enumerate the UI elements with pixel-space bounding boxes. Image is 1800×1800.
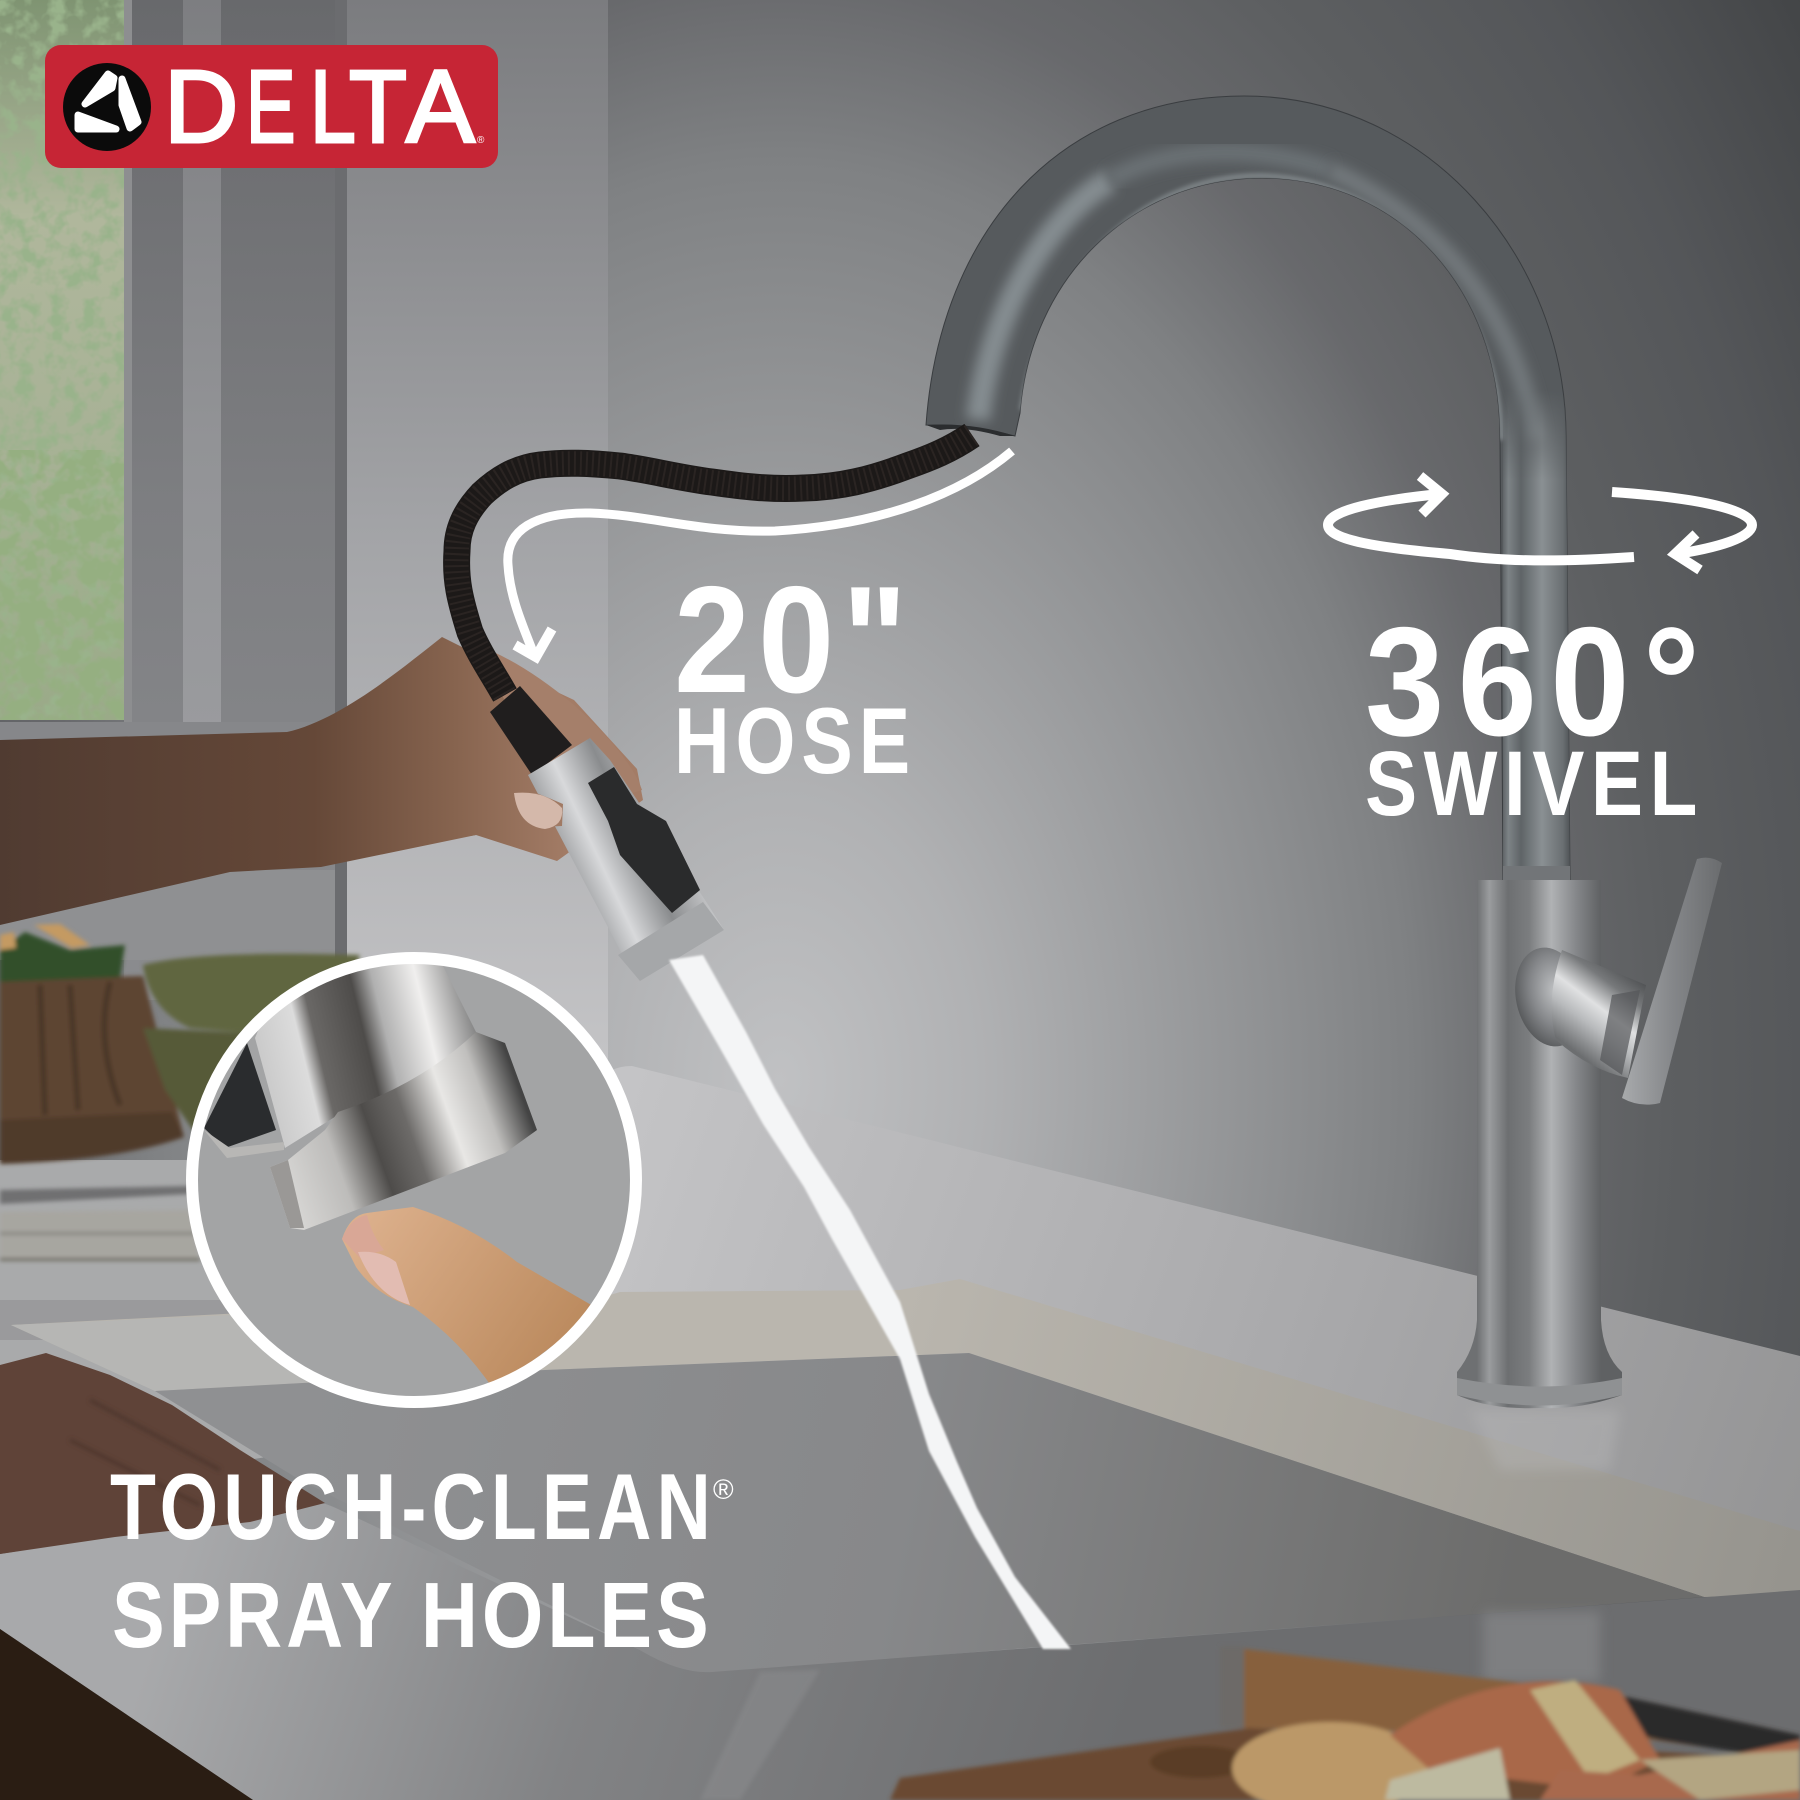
lever handle — [1622, 858, 1722, 1105]
handle hub — [1506, 941, 1646, 1078]
bottom right cutting board and fruit — [890, 1646, 1800, 1800]
left wall section — [347, 0, 608, 1100]
base body — [1457, 866, 1622, 1408]
touch-clean label: TOUCH-CLEAN — [110, 1455, 711, 1560]
apple slices — [1232, 1680, 1800, 1800]
wordmark: E — [246, 50, 295, 165]
connector — [490, 686, 572, 775]
thumb — [440, 770, 563, 836]
swivel label: SWIVEL — [1365, 733, 1697, 835]
threaded nub — [270, 1160, 304, 1228]
left countertop — [0, 1160, 620, 1500]
arm and hand — [0, 637, 643, 925]
faucet — [926, 96, 1722, 1408]
upper barrel — [255, 964, 476, 1148]
touch-clean label — [110, 1455, 734, 1667]
swivel label: 360° — [1365, 594, 1700, 768]
chrome body — [528, 738, 724, 980]
hose label: 20" — [674, 554, 907, 725]
salad — [0, 932, 125, 982]
fingertip — [342, 1207, 600, 1390]
faucet reflection — [1483, 1612, 1600, 1682]
window foliage — [0, 0, 124, 720]
wooden bowl — [0, 976, 184, 1164]
fingernail — [358, 1252, 410, 1305]
thumbnail — [514, 793, 562, 829]
icon: Delta triangle mark — [63, 63, 151, 151]
black side panel — [204, 1043, 276, 1148]
sprayer close-up — [204, 940, 537, 1230]
inset: touch-clean spray holes — [192, 940, 636, 1402]
front counter — [0, 1500, 1800, 1800]
cutting board — [890, 1728, 1800, 1800]
wordmark: D — [164, 49, 238, 164]
wordmark: L — [310, 49, 356, 164]
pull-down hose — [457, 435, 972, 695]
wordmark — [164, 48, 475, 165]
lower hand on counter — [0, 1353, 325, 1554]
Delta logo: ® — [477, 135, 485, 146]
window frame — [0, 0, 347, 1000]
wordmark: T — [349, 48, 407, 164]
spout — [926, 96, 1570, 880]
knife — [1220, 1646, 1800, 1762]
Delta logo — [45, 45, 498, 168]
sink lip — [11, 1279, 1800, 1597]
touch-clean label: ® — [713, 1474, 734, 1505]
clip — [204, 1130, 284, 1158]
green bowls — [143, 954, 360, 1040]
countertop back — [560, 1066, 1800, 1560]
hose label: HOSE — [674, 689, 910, 794]
sink basin — [155, 1353, 1704, 1674]
touch-clean label: SPRAY HOLES — [112, 1564, 709, 1667]
hose length arrow — [508, 451, 1012, 657]
cabinet — [0, 1629, 253, 1800]
buttons — [588, 767, 700, 913]
swivel arrows — [1328, 476, 1752, 570]
wordmark: A — [406, 49, 475, 164]
spray head — [440, 686, 724, 981]
water stream — [669, 955, 1071, 1649]
salad bowl and dishes — [0, 924, 360, 1262]
lower barrel — [270, 1032, 537, 1230]
folded napkins — [0, 1210, 200, 1262]
